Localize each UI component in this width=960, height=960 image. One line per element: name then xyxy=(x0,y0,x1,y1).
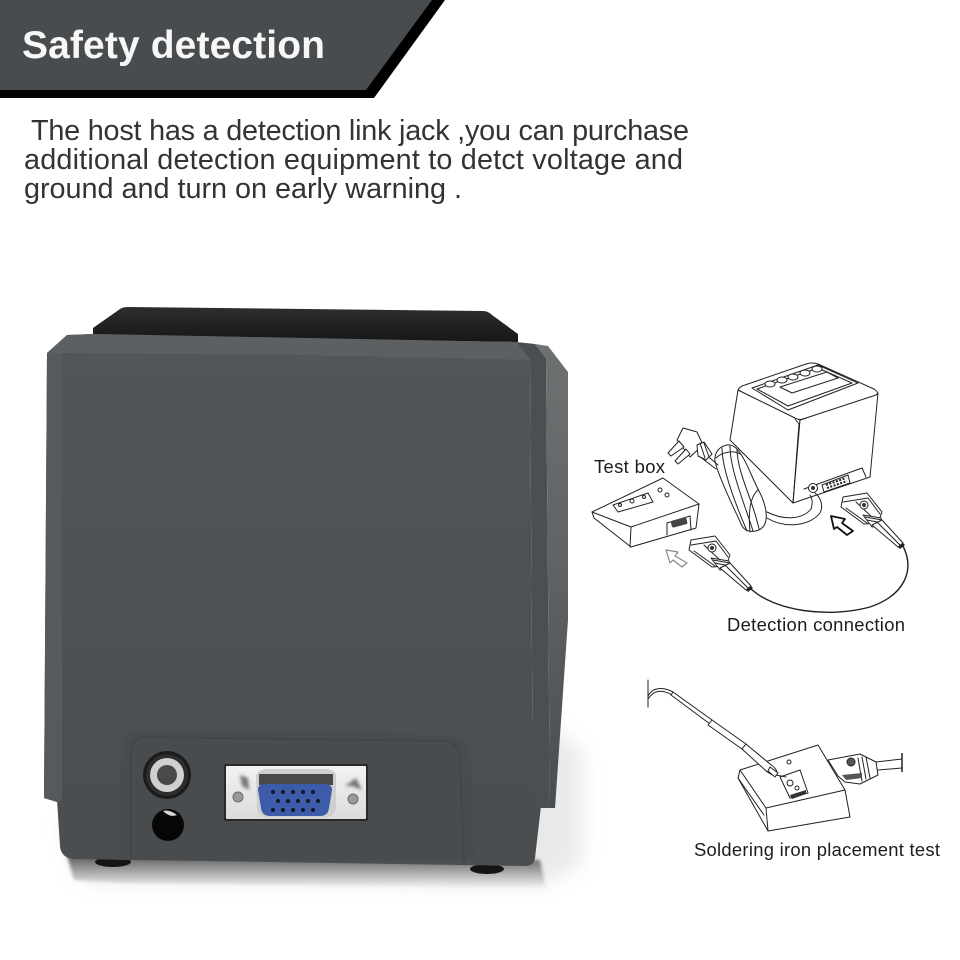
top bevel band xyxy=(47,334,530,360)
soft side shadow xyxy=(60,730,582,885)
screws xyxy=(233,792,358,804)
coiled cord xyxy=(715,445,766,531)
description text: additional detection equipment to detct voltage and xyxy=(24,144,683,176)
metal shell xyxy=(256,769,336,817)
feet xyxy=(95,857,504,874)
arrow: to station xyxy=(831,516,853,535)
round socket xyxy=(152,809,184,841)
diagram: detection connection xyxy=(592,363,908,635)
black top lid xyxy=(93,307,518,342)
blue insert xyxy=(258,784,332,816)
detection cable xyxy=(750,546,908,612)
right side panel xyxy=(516,342,568,808)
audio jack xyxy=(143,751,191,799)
product: soldering station rear view xyxy=(44,307,582,888)
description text xyxy=(24,115,689,205)
description text: The host has a detection link jack ,you can purchase xyxy=(31,115,689,147)
upper shell front xyxy=(44,334,533,810)
connector to test box xyxy=(689,536,753,592)
floor shadow xyxy=(66,852,546,888)
connector to station xyxy=(841,493,905,549)
port xyxy=(667,516,691,535)
diagram: soldering iron placement test xyxy=(648,680,940,860)
stand connector and cable xyxy=(828,753,902,784)
title banner xyxy=(0,0,445,98)
arrow: to test box xyxy=(666,550,687,567)
rear port xyxy=(804,468,866,489)
pins xyxy=(271,790,320,812)
soldering iron xyxy=(648,680,786,777)
power cord xyxy=(668,428,822,532)
description text: ground and turn on early warning . xyxy=(24,173,462,205)
test box xyxy=(592,478,699,547)
plug xyxy=(677,428,703,457)
VGA port xyxy=(224,764,368,821)
label: detection connection: Detection connection xyxy=(727,614,905,635)
iron stand xyxy=(738,745,850,831)
label: test box: Test box xyxy=(594,456,665,477)
left edge bevel xyxy=(44,353,62,802)
rear recess panel xyxy=(118,730,475,862)
title: Safety detection xyxy=(22,24,325,67)
lower body xyxy=(57,720,541,866)
line-art station xyxy=(730,363,878,503)
label: soldering iron placement test: Soldering iron placement test xyxy=(694,839,940,860)
